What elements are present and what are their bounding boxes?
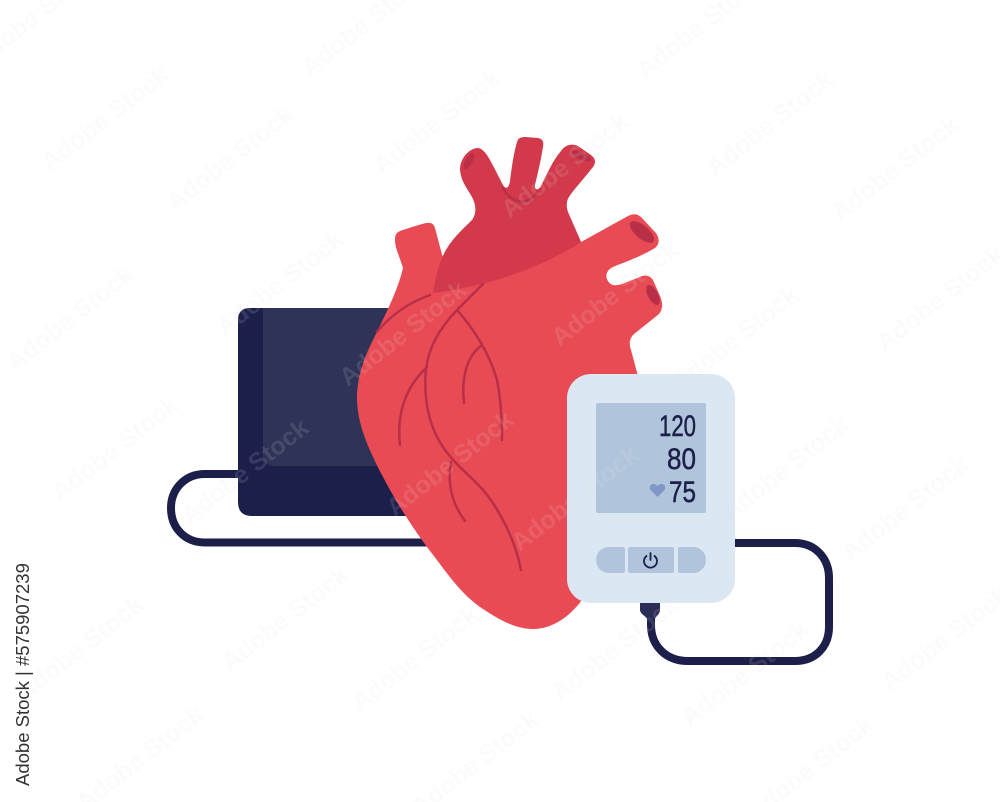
watermark pattern: Adobe Stock	[216, 561, 354, 677]
icon: power	[644, 553, 657, 568]
watermark pattern: Adobe Stock	[546, 236, 684, 352]
blood pressure cuff	[238, 308, 440, 516]
heart	[357, 137, 663, 629]
watermark pattern: Adobe Stock	[11, 591, 149, 707]
watermark pattern: Adobe Stock	[36, 61, 174, 177]
monitor screen	[596, 403, 706, 513]
heart: left vessel	[377, 223, 444, 332]
heart: coronary veins	[377, 188, 537, 570]
blood pressure monitor	[567, 374, 735, 603]
watermark pattern: Adobe Stock	[211, 226, 349, 342]
monitor body	[567, 374, 735, 603]
watermark pattern: Adobe Stock	[368, 64, 506, 180]
button: left	[596, 547, 625, 573]
watermark pattern: Adobe Stock	[334, 276, 472, 392]
reading: pulse 75: 75	[669, 476, 696, 509]
watermark pattern: Adobe Stock	[716, 411, 854, 527]
heart: vessel openings	[462, 148, 663, 307]
heart: aorta	[433, 137, 595, 296]
watermark pattern: Adobe Stock	[381, 406, 519, 522]
stock credit: Adobe Stock | #575907239	[12, 563, 33, 786]
watermark pattern: Adobe Stock	[176, 414, 314, 530]
reading: diastolic 80: 80	[667, 443, 696, 476]
watermark pattern: Adobe Stock	[1, 261, 139, 377]
watermark pattern: Adobe Stock	[546, 591, 684, 707]
icon: pulse heart	[650, 484, 665, 497]
watermark pattern: Adobe Stock	[826, 111, 964, 227]
watermark pattern: Adobe Stock	[506, 441, 644, 557]
button: right	[678, 547, 706, 573]
cuff tube: left cable	[171, 474, 440, 542]
watermark pattern: Adobe Stock	[346, 601, 484, 717]
watermark pattern: Adobe Stock	[496, 108, 634, 224]
monitor cable	[640, 543, 829, 661]
watermark pattern: Adobe Stock	[836, 451, 974, 567]
watermark pattern: Adobe Stock	[676, 616, 814, 732]
watermark pattern: Adobe Stock	[701, 66, 839, 182]
button: power	[628, 547, 674, 573]
watermark pattern: Adobe Stock	[161, 101, 299, 217]
watermark pattern: Adobe Stock	[666, 281, 804, 397]
reading: systolic 120: 120	[659, 410, 696, 443]
watermark pattern: Adobe Stock	[46, 391, 184, 507]
heart: ventricle body	[357, 214, 662, 629]
